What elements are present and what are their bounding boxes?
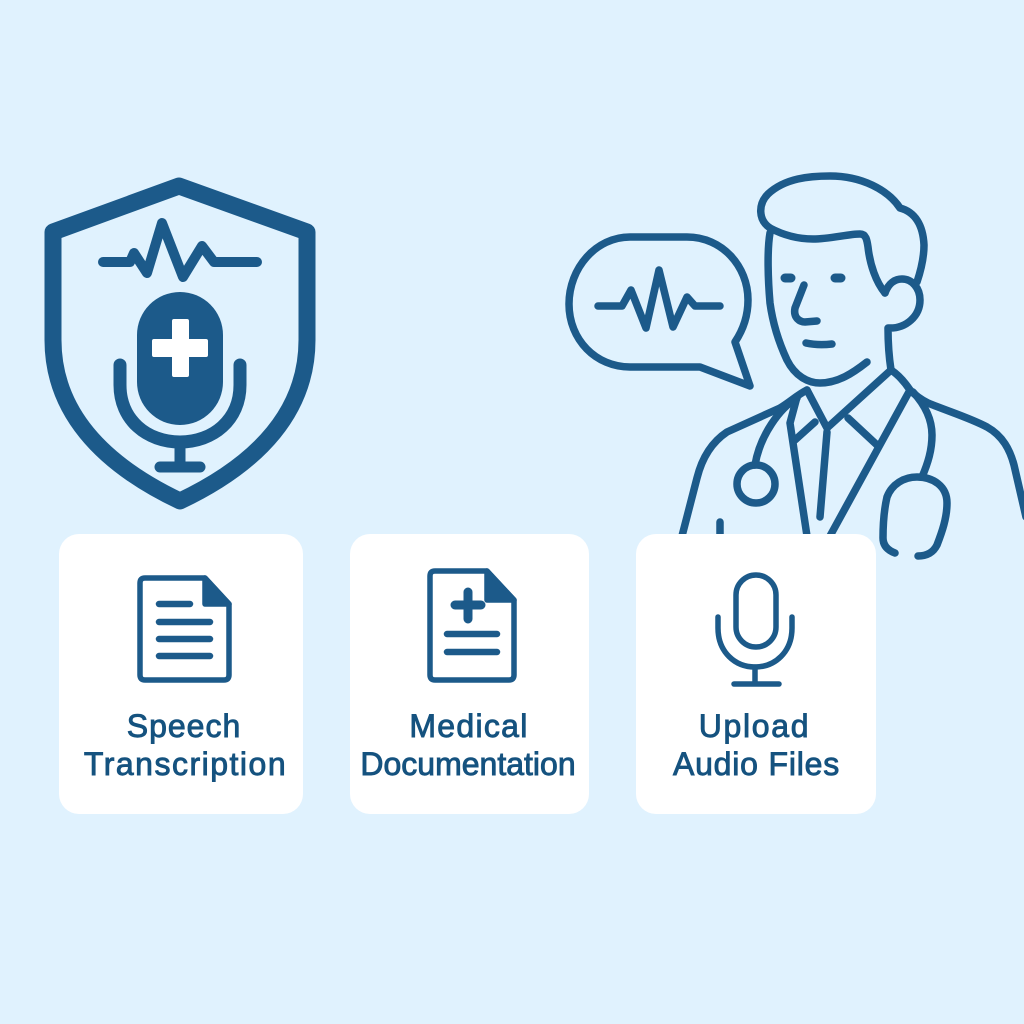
medical cross <box>152 319 208 377</box>
label: Audio Files <box>673 746 840 782</box>
icon: document with plus <box>427 568 517 683</box>
microphone stand <box>120 365 240 467</box>
doctor head <box>761 176 924 383</box>
icon: microphone <box>715 572 795 687</box>
microphone head <box>137 292 223 425</box>
doctor body <box>682 370 1024 556</box>
label: Medical <box>409 708 529 744</box>
icon: document with lines <box>137 575 232 683</box>
stethoscope <box>737 392 947 556</box>
label <box>84 708 287 782</box>
card: medical documentation <box>350 534 589 814</box>
label <box>360 708 576 782</box>
shield icon with microphone <box>44 178 316 510</box>
shield outline <box>53 186 307 501</box>
shield heartbeat <box>103 223 257 277</box>
card: speech transcription <box>59 534 303 814</box>
label: Documentation <box>360 746 576 782</box>
label: Transcription <box>84 746 287 782</box>
speech bubble with heartbeat <box>569 237 750 386</box>
label: Upload <box>699 708 810 744</box>
label <box>672 708 840 782</box>
label: Speech <box>127 708 241 744</box>
card: upload audio files <box>636 534 876 814</box>
